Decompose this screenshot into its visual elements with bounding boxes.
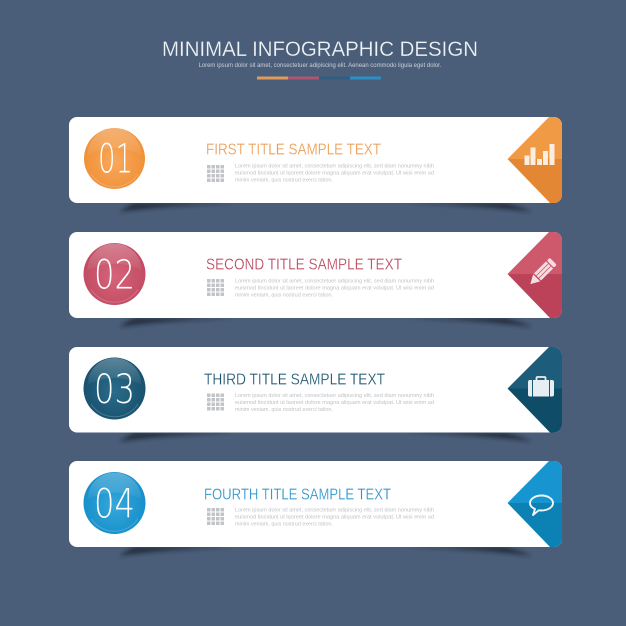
body text [235,393,434,413]
arrow tab [508,232,562,318]
body text: Lorem ipsum dolor sit amet, consectetuer adipiscing elit, sed diam nonummy nibh [235,508,434,514]
header [162,38,478,80]
number badge 04: 04 [94,482,135,528]
icon: bar chart [524,144,554,165]
body text: euismod tincidunt ut laoreet dolore magna aliquam erat volutpat. Ut wisi enim ad [235,286,434,292]
card [69,461,562,547]
grid icon [207,165,224,182]
number badge 01: 01 [98,136,133,182]
panel: first row [69,117,562,212]
body text [235,164,434,184]
icon: briefcase [528,377,554,396]
grid icon [207,279,224,296]
card shadow [120,203,532,212]
body text [235,508,434,528]
body text [235,278,434,298]
card shadow [120,547,532,556]
card shadow [120,318,532,327]
colour strip [257,76,381,80]
body text: minim veniam, quis nostrud exerci tation. [235,292,333,298]
number badge 02: 02 [94,252,135,298]
card [69,117,562,203]
icon: pencil [527,258,557,288]
arrow tab [508,117,562,203]
card [69,347,562,432]
grid icon [207,394,224,410]
heading: FOURTH TITLE SAMPLE TEXT [204,486,391,504]
panel: second row [69,232,562,327]
heading: SECOND TITLE SAMPLE TEXT [206,256,402,274]
body text: Lorem ipsum dolor sit amet, consectetuer adipiscing elit, sed diam nonummy nibh [235,393,434,399]
body text: minim veniam, quis nostrud exerci tation. [235,407,333,413]
heading: FIRST TITLE SAMPLE TEXT [206,142,381,158]
body text: euismod tincidunt ut laoreet dolore magna aliquam erat volutpat. Ut wisi enim ad [235,514,434,520]
body text: minim veniam, quis nostrud exerci tation. [235,178,333,184]
number badge 03: 03 [94,367,135,413]
card [69,232,562,318]
heading: THIRD TITLE SAMPLE TEXT [204,372,385,388]
number badge 04 [84,472,146,534]
grid icon [207,508,224,525]
number badge 02 [84,243,146,305]
body text: Lorem ipsum dolor sit amet, consectetuer adipiscing elit, sed diam nonummy nibh [235,278,434,284]
arrow tab [508,347,562,432]
title: MINIMAL INFOGRAPHIC DESIGN [162,38,478,61]
body text: Lorem ipsum dolor sit amet, consectetuer adipiscing elit, sed diam nonummy nibh [235,164,434,170]
body text: euismod tincidunt ut laoreet dolore magna aliquam erat volutpat. Ut wisi enim ad [235,170,434,176]
arrow tab [508,461,562,547]
panel: fourth row [69,461,562,556]
number badge 03 [84,358,146,420]
icon: speech bubble [530,496,553,515]
body text: euismod tincidunt ut laoreet dolore magna aliquam erat volutpat. Ut wisi enim ad [235,400,434,406]
subtitle: Lorem ipsum dolor sit amet, consectetuer adipiscing elit. Aenean commodo ligula eget dolor. [198,63,442,69]
panel: third row [69,347,562,442]
number badge 01 [84,128,145,189]
card shadow [120,432,532,442]
body text: minim veniam, quis nostrud exerci tation. [235,522,333,528]
